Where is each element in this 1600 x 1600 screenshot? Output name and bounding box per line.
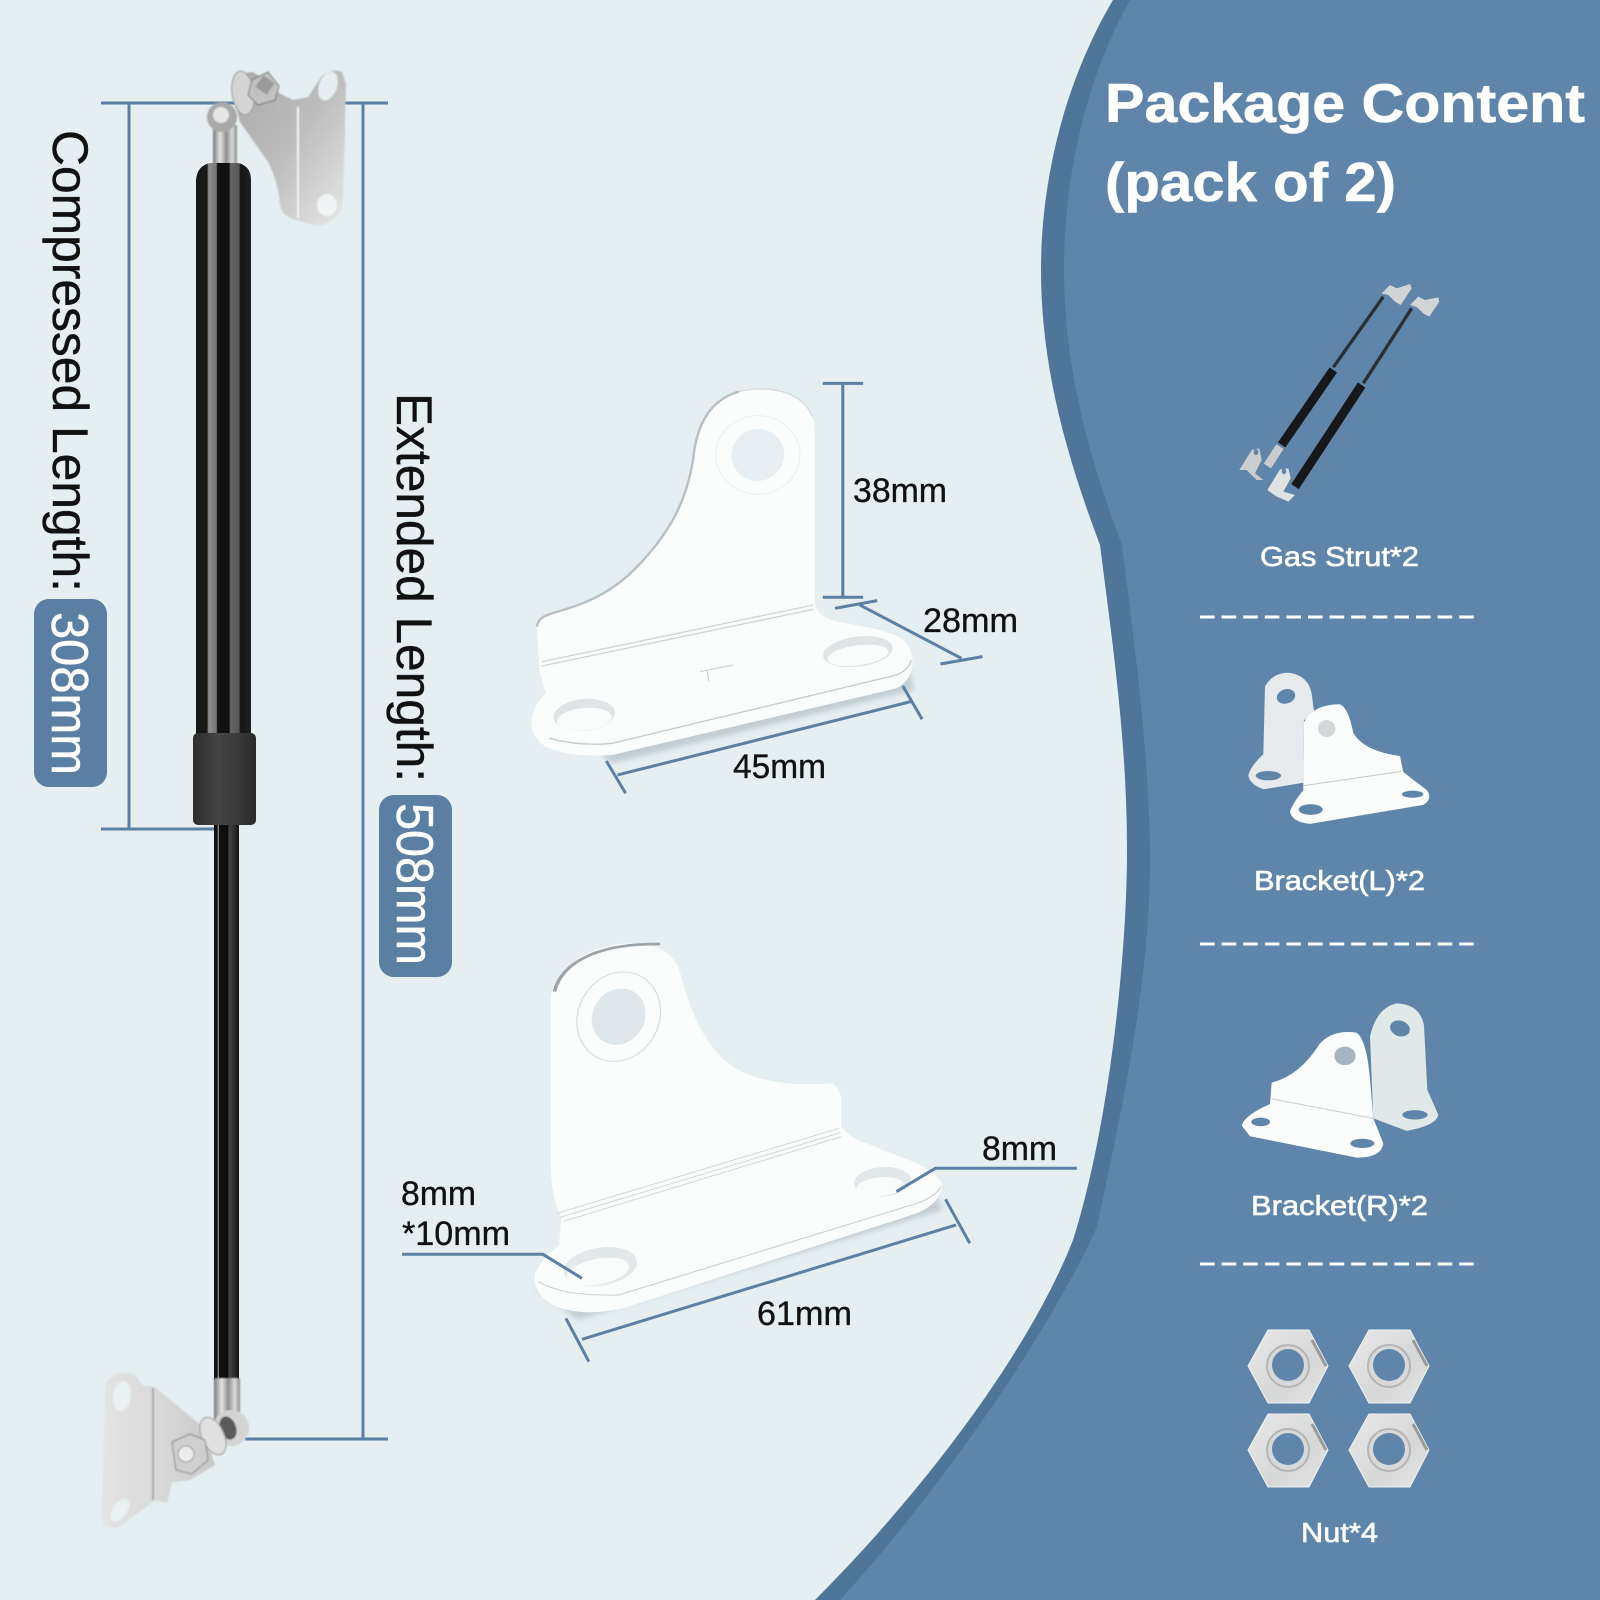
label 61mm: 61mm xyxy=(757,1295,852,1333)
label 8mm right: 8mm xyxy=(982,1130,1057,1168)
pill: 308mm: 308mm xyxy=(40,612,98,775)
gas strut product xyxy=(102,69,346,1528)
piston rod xyxy=(214,825,239,1380)
bottom rod end and bolt xyxy=(172,1378,249,1474)
top mounting bracket xyxy=(233,69,346,225)
strut cylinder body xyxy=(196,163,251,735)
label 38mm: 38mm xyxy=(853,472,947,510)
label 8mm x 10mm xyxy=(401,1175,510,1253)
label: bracket R: Bracket(R)*2 xyxy=(1251,1190,1428,1221)
divider 3 xyxy=(1200,1262,1479,1266)
icon: four nuts xyxy=(1248,1330,1429,1487)
bracket shadow xyxy=(536,1183,942,1320)
label: extended length: Extended Length: xyxy=(386,393,442,782)
nut bottom left xyxy=(1248,1414,1328,1487)
dimension lines R bracket xyxy=(402,1168,1077,1362)
bottom mounting bracket xyxy=(102,1373,215,1528)
bracket R shape xyxy=(535,943,942,1312)
icon: right brackets pair xyxy=(1242,1003,1438,1158)
pill: 508mm: 508mm xyxy=(385,803,443,965)
icon: two gas struts xyxy=(1239,284,1439,502)
label 8mm x 10mm: 8mm xyxy=(401,1175,476,1213)
top rod end and bolt xyxy=(207,70,279,167)
nut top left xyxy=(1248,1330,1328,1403)
label 28mm: 28mm xyxy=(923,602,1018,640)
heading: package content: Package Content xyxy=(1105,72,1585,134)
nut bottom right xyxy=(1349,1414,1429,1487)
label: bracket L: Bracket(L)*2 xyxy=(1254,865,1425,896)
strut collar xyxy=(193,733,256,825)
divider 1 xyxy=(1200,616,1479,618)
bracket R with dimensions xyxy=(401,943,1077,1362)
label 45mm: 45mm xyxy=(733,748,826,786)
dimension lines: strut lengths xyxy=(101,103,388,1439)
heading: package content: (pack of 2) xyxy=(1105,151,1396,213)
icon: left brackets pair xyxy=(1248,673,1429,824)
panel: package content background xyxy=(815,0,1600,1600)
label: gas strut: Gas Strut*2 xyxy=(1260,541,1419,572)
bracket L with dimensions xyxy=(531,383,1018,793)
heading: package content xyxy=(1105,72,1585,213)
divider 2 xyxy=(1200,942,1479,946)
bracket L shape xyxy=(531,389,913,756)
label: nut: Nut*4 xyxy=(1301,1517,1378,1548)
bracket shadow xyxy=(546,660,914,763)
label 8mm x 10mm: *10mm xyxy=(402,1215,510,1253)
label: compressed length: Compressed Length: xyxy=(42,130,98,592)
nut top right xyxy=(1349,1330,1429,1403)
dimension lines L bracket xyxy=(606,383,982,793)
